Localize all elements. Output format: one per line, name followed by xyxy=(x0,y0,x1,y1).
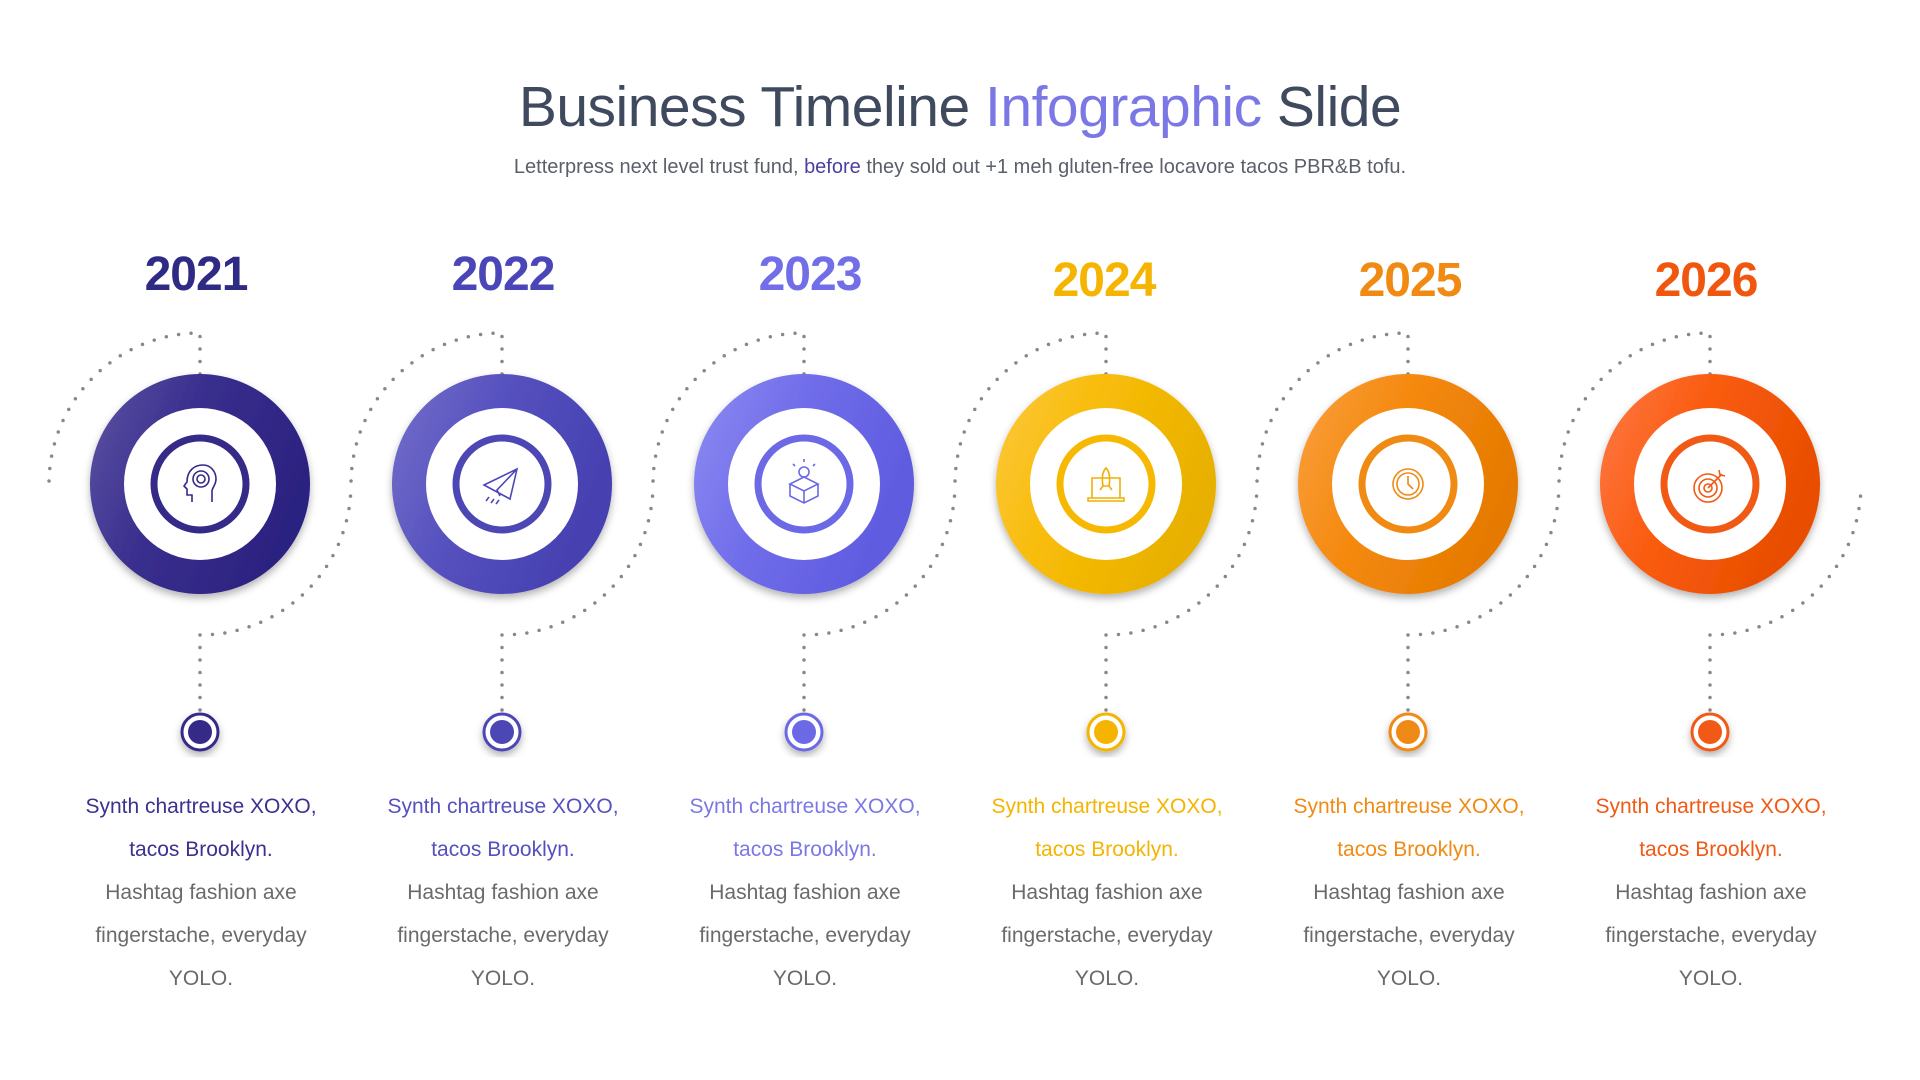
text 2025: Hashtag fashion axe xyxy=(1313,881,1505,904)
text 2026: YOLO. xyxy=(1679,967,1743,990)
icon: head maze xyxy=(184,465,216,502)
circle 2021 xyxy=(90,374,310,594)
title: Business Timeline Infographic Slide xyxy=(519,75,1401,139)
icon: target xyxy=(1694,470,1725,502)
text 2026: fingerstache, everyday xyxy=(1605,924,1817,947)
text 2024: YOLO. xyxy=(1075,967,1139,990)
text 2021: Hashtag fashion axe xyxy=(105,881,297,904)
text 2025 xyxy=(1293,795,1525,990)
text 2021: tacos Brooklyn. xyxy=(129,838,273,861)
text 2024: Hashtag fashion axe xyxy=(1011,881,1203,904)
subtitle: Letterpress next level trust fund, before they sold out +1 meh gluten-free locavore tacos PBR&B tofu. xyxy=(514,156,1406,178)
circle 2022 xyxy=(392,374,612,594)
text 2022: Hashtag fashion axe xyxy=(407,881,599,904)
text 2023: fingerstache, everyday xyxy=(699,924,911,947)
icon: clock xyxy=(1393,469,1423,499)
year 2022: 2022 xyxy=(452,248,554,301)
text 2023: tacos Brooklyn. xyxy=(733,838,877,861)
text 2023: Hashtag fashion axe xyxy=(709,881,901,904)
year 2021: 2021 xyxy=(145,248,247,301)
text 2024 xyxy=(991,795,1223,990)
text 2021: YOLO. xyxy=(169,967,233,990)
text 2022: Synth chartreuse XOXO, xyxy=(387,795,619,818)
text 2024: Synth chartreuse XOXO, xyxy=(991,795,1223,818)
text 2023 xyxy=(689,795,921,990)
text 2025: tacos Brooklyn. xyxy=(1337,838,1481,861)
text 2026 xyxy=(1595,795,1827,990)
text 2022 xyxy=(387,795,619,990)
dotted connectors xyxy=(49,333,1861,710)
text 2025: fingerstache, everyday xyxy=(1303,924,1515,947)
text 2021 xyxy=(85,795,317,990)
text 2025: Synth chartreuse XOXO, xyxy=(1293,795,1525,818)
text 2023: Synth chartreuse XOXO, xyxy=(689,795,921,818)
year 2025: 2025 xyxy=(1359,254,1461,307)
text 2026: Synth chartreuse XOXO, xyxy=(1595,795,1827,818)
text 2021: fingerstache, everyday xyxy=(95,924,307,947)
icon: box idea xyxy=(790,459,818,503)
circle 2023 xyxy=(694,374,914,594)
text 2022: fingerstache, everyday xyxy=(397,924,609,947)
text 2024: tacos Brooklyn. xyxy=(1035,838,1179,861)
icon: laptop rocket xyxy=(1088,468,1124,501)
text 2026: tacos Brooklyn. xyxy=(1639,838,1783,861)
markers xyxy=(182,714,1728,750)
text 2022: YOLO. xyxy=(471,967,535,990)
text 2022: tacos Brooklyn. xyxy=(431,838,575,861)
text 2024: fingerstache, everyday xyxy=(1001,924,1213,947)
year 2026: 2026 xyxy=(1655,254,1757,307)
year 2024: 2024 xyxy=(1053,254,1155,307)
circle 2024 xyxy=(996,374,1216,594)
year 2023: 2023 xyxy=(759,248,861,301)
circle 2026 xyxy=(1600,374,1820,594)
icon: paper plane xyxy=(484,469,517,504)
text 2023: YOLO. xyxy=(773,967,837,990)
text 2026: Hashtag fashion axe xyxy=(1615,881,1807,904)
circle 2025 xyxy=(1298,374,1518,594)
text 2021: Synth chartreuse XOXO, xyxy=(85,795,317,818)
text 2025: YOLO. xyxy=(1377,967,1441,990)
